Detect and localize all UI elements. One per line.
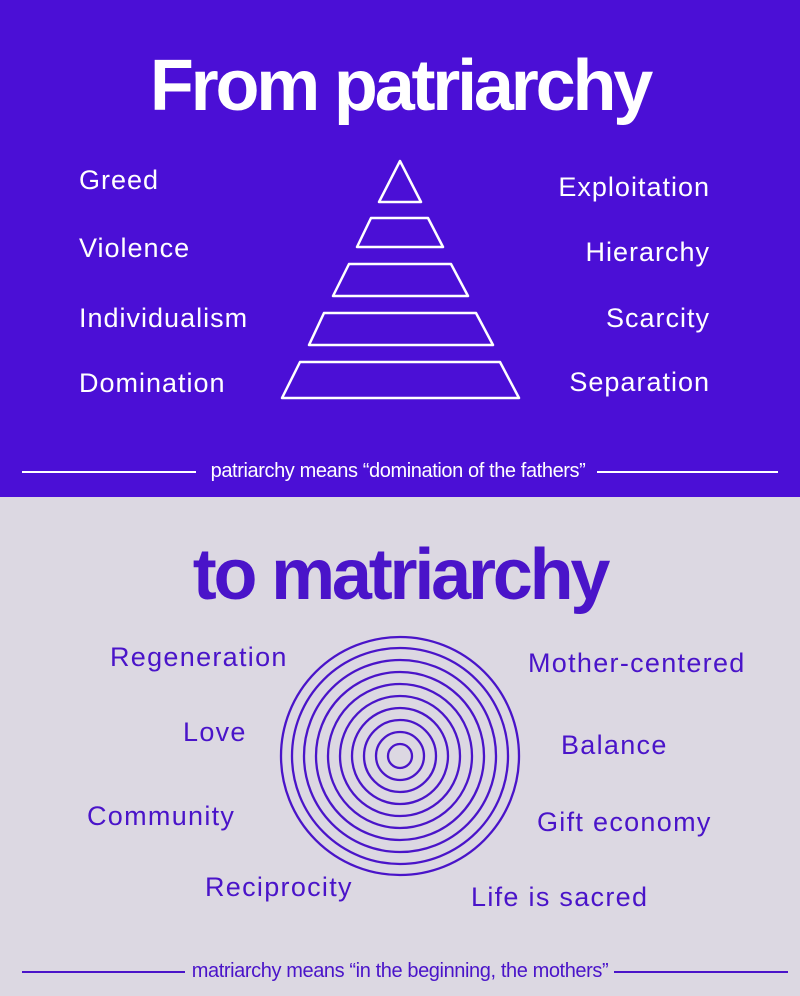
panel: matriarchy: Balance (561, 730, 668, 760)
right labels: Exploitation (558, 172, 710, 202)
panel: matriarchy: Community (87, 801, 235, 831)
title: to matriarchy (193, 535, 607, 615)
pyramid icon (280, 160, 520, 400)
left labels: Regeneration (110, 642, 288, 672)
title: From patriarchy (150, 46, 650, 126)
panel: matriarchy: Gift economy (537, 807, 712, 837)
footer: patriarchy definition (22, 471, 196, 472)
panel: matriarchy: Life is sacred (471, 882, 648, 912)
panel: matriarchy: Love (183, 717, 247, 747)
footer: matriarchy definition (22, 971, 185, 972)
concentric circles icon (280, 636, 520, 876)
panel: patriarchy: patriarchy means “domination of the fathers” (211, 460, 585, 482)
panel: patriarchy: Individualism (79, 303, 248, 333)
panel: patriarchy: Domination (79, 368, 226, 398)
right labels: Mother-centered (528, 648, 746, 678)
panel: patriarchy: Violence (79, 233, 190, 263)
left labels: Greed (79, 165, 159, 195)
panel: matriarchy: matriarchy means “in the beginning, the mothers” (192, 960, 608, 982)
panel: patriarchy: Separation (569, 367, 710, 397)
panel: matriarchy (22, 535, 788, 982)
panel: patriarchy: Hierarchy (585, 237, 710, 267)
panel: patriarchy: Scarcity (606, 303, 710, 333)
panel: matriarchy: Reciprocity (205, 872, 353, 902)
panel: patriarchy (0, 0, 800, 497)
